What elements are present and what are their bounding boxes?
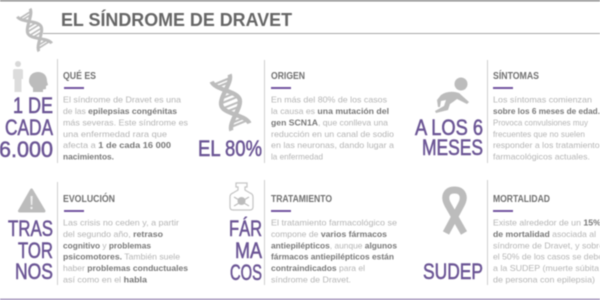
text block: origen: en las neuronas, dando lugar a xyxy=(271,140,394,150)
panel: evolución xyxy=(8,182,188,285)
text block: evolución xyxy=(63,218,188,284)
text block: mortalidad: Existe alrededor de un 15% xyxy=(493,218,600,228)
accent bar xyxy=(64,210,84,212)
big figure: a los 6 meses: MESES xyxy=(422,135,483,160)
accent bar xyxy=(64,87,84,89)
text block: origen: En más del 80% de los casos xyxy=(271,94,387,104)
text block: qué es: afecta a 1 de cada 16 000 xyxy=(63,140,171,150)
accent bar xyxy=(493,87,513,89)
text block: qué es: de las epilepsias congénitas xyxy=(63,106,177,116)
text block: qué es xyxy=(63,94,188,162)
text block: qué es: una enfermedad rara que xyxy=(63,129,167,139)
big figure: 1 de cada 16.000: 1 DE xyxy=(13,93,53,118)
icon: DNA helix header xyxy=(17,9,52,51)
text block: síntomas: Provoca convulsiones muy xyxy=(493,118,589,128)
text block: síntomas: sobre los 6 meses de edad. xyxy=(493,106,600,116)
text block: evolución: psicomotores. También suele xyxy=(63,252,180,262)
text block: síntomas: Los síntomas comienzan xyxy=(493,94,592,104)
panel: qué es xyxy=(0,59,188,163)
text block: síntomas: farmacológicos actuales. xyxy=(493,152,590,162)
text block: mortalidad: síndrome de Dravet, y sobre xyxy=(493,240,600,250)
text block: origen: la enfermedad xyxy=(271,152,323,162)
icon: crawling baby xyxy=(435,78,469,113)
text block: mortalidad: de mortalidad asociada al xyxy=(493,229,596,239)
text block: tratamiento: fármacos antiepilépticos están xyxy=(271,252,394,262)
panel: tratamiento xyxy=(229,180,397,285)
text block: qué es: El síndrome de Dravet es una xyxy=(63,94,181,104)
text block: tratamiento: contraindicados para el xyxy=(271,263,365,273)
text block: evolución: Las crisis no ceden y, a partir xyxy=(63,218,179,228)
heading: origen: ORIGEN xyxy=(271,71,305,82)
panel: origen xyxy=(198,60,394,163)
text block: mortalidad: el 50% de los casos se debe xyxy=(493,252,600,262)
big figure: sudep: SUDEP xyxy=(423,259,483,284)
text block: origen: reducción en un canal de sodio xyxy=(271,129,394,139)
big figure: 1 de cada 16.000 xyxy=(0,93,53,162)
big figure: trastornos: TRAS xyxy=(8,216,53,241)
big figure: trastornos: NOS xyxy=(15,259,53,284)
icon: warning triangle xyxy=(20,190,44,211)
title: EL SÍNDROME DE DRAVET xyxy=(61,9,292,30)
text block: mortalidad xyxy=(493,218,600,284)
big figure: 1 de cada 16.000: 6.000 xyxy=(0,137,53,162)
icon: poison bottle xyxy=(230,183,253,210)
big figure: fármacos: MA xyxy=(235,238,262,263)
big figure: el 80%: EL 80% xyxy=(198,136,262,161)
heading: mortalidad: MORTALIDAD xyxy=(493,194,550,205)
text block: tratamiento: antiepilépticos, aunque algunos xyxy=(271,240,397,250)
big figure: trastornos: TOR xyxy=(18,238,53,263)
text block: qué es: más severas. Este síndrome es xyxy=(63,118,188,128)
text block: evolución: haber problemas conductuales xyxy=(63,263,188,273)
text block: tratamiento: El tratamiento farmacológico se xyxy=(271,218,397,228)
text block: evolución: cognitivo y problemas xyxy=(63,240,151,250)
big figure: fármacos xyxy=(229,216,262,285)
big figure: a los 6 meses: A LOS 6 xyxy=(415,115,483,140)
heading: tratamiento: TRATAMIENTO xyxy=(271,194,332,205)
accent bar xyxy=(493,210,513,212)
text block: qué es: nacimientos. xyxy=(63,152,114,162)
big figure: 1 de cada 16.000: CADA xyxy=(5,115,53,140)
text block: tratamiento xyxy=(271,218,397,284)
heading: síntomas: SÍNTOMAS xyxy=(493,69,539,82)
big figure: trastornos xyxy=(8,216,53,284)
heading: evolución: EVOLUCIÓN xyxy=(63,192,115,205)
text block: evolución: así como en el habla xyxy=(63,274,147,284)
text block: origen: la causa es una mutación del xyxy=(271,106,389,116)
icon: awareness ribbon xyxy=(446,190,464,233)
icon: DNA helix xyxy=(212,74,249,131)
text block: origen xyxy=(271,94,394,162)
text block: síntomas xyxy=(493,94,600,162)
text block: tratamiento: compone de varios fármacos xyxy=(271,229,387,239)
text block: mortalidad: de persona con epilepsia) xyxy=(493,274,595,284)
text block: síntomas: responder a los tratamientos xyxy=(493,140,600,150)
panel: síntomas xyxy=(415,60,600,163)
text block: síntomas: frecuentes que no suelen xyxy=(493,129,585,139)
big figure: fármacos: COS xyxy=(230,260,262,285)
heading: qué es: QUÉ ES xyxy=(63,69,96,82)
text block: tratamiento: síndrome de Dravet. xyxy=(271,274,351,284)
text block: origen: gen SCN1A, que conlleva una xyxy=(271,118,388,128)
icon: person and head xyxy=(13,61,48,92)
big figure: a los 6 meses xyxy=(415,115,483,160)
text block: mortalidad: a la SUDEP (muerte súbita xyxy=(493,263,599,273)
panel: mortalidad xyxy=(423,180,600,285)
accent bar xyxy=(271,87,291,89)
big figure: fármacos: FÁR xyxy=(229,216,262,241)
accent bar xyxy=(271,210,291,212)
text block: evolución: del segundo año, retraso xyxy=(63,229,163,239)
